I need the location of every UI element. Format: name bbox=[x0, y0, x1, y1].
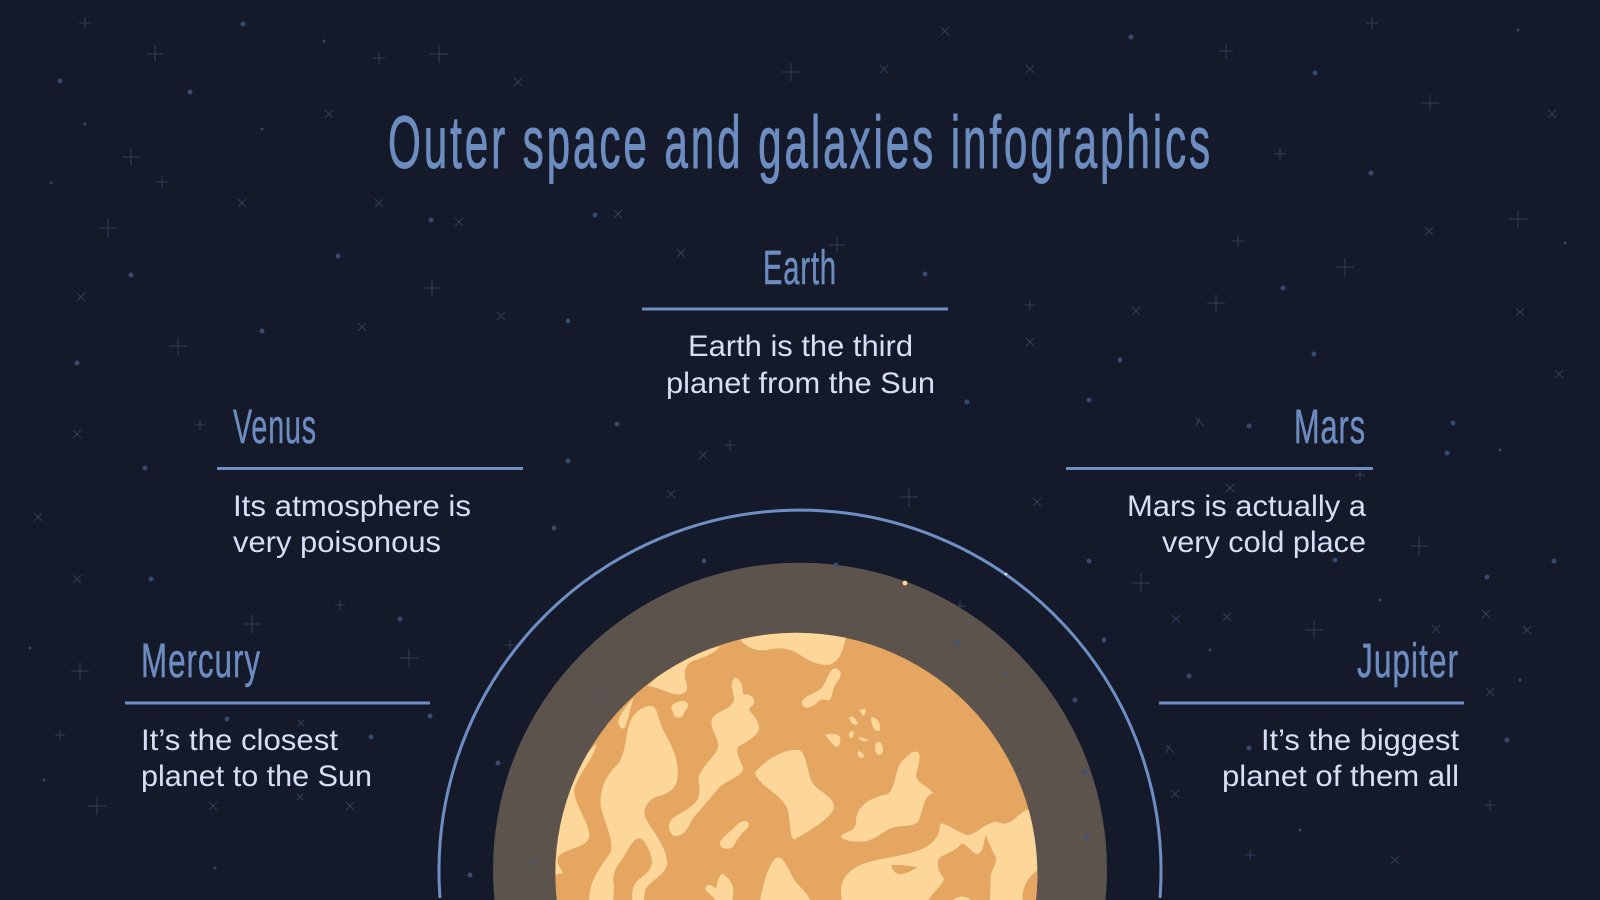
heading: Mercury: Mercury bbox=[141, 635, 261, 688]
panel: Mars bbox=[1066, 401, 1373, 559]
planet Venus-like globe bbox=[550, 627, 1047, 900]
heading: Mars: Mars bbox=[1294, 401, 1366, 454]
panel: Earth bbox=[642, 242, 948, 400]
panel: Mercury bbox=[125, 635, 430, 793]
planet atmosphere ring bbox=[493, 563, 1107, 900]
text: Venus description: Its atmosphere is bbox=[233, 490, 471, 523]
panel: Jupiter bbox=[1159, 635, 1464, 793]
text: Mercury description: planet to the Sun bbox=[141, 760, 372, 793]
text: Jupiter description: planet of them all bbox=[1222, 760, 1459, 793]
text: Mars description: very cold place bbox=[1162, 526, 1366, 559]
panel: Venus bbox=[217, 401, 523, 559]
outer orbit ring bbox=[439, 510, 1161, 898]
planet top-left patch bbox=[647, 647, 720, 694]
heading: Jupiter: Jupiter bbox=[1357, 635, 1459, 688]
heading: Venus: Venus bbox=[233, 401, 317, 454]
text: Earth description: Earth is the third bbox=[688, 330, 913, 363]
planet top patch bbox=[740, 632, 846, 665]
text: Jupiter description: It’s the biggest bbox=[1261, 724, 1460, 757]
small moon dots on the rings bbox=[903, 573, 1007, 585]
heading: Earth: Earth bbox=[763, 242, 837, 295]
text: Venus description: very poisonous bbox=[233, 526, 441, 559]
text: Mercury description: It’s the closest bbox=[141, 724, 339, 757]
text: Earth description: planet from the Sun bbox=[666, 367, 935, 400]
text: Mars description: Mars is actually a bbox=[1127, 490, 1366, 523]
